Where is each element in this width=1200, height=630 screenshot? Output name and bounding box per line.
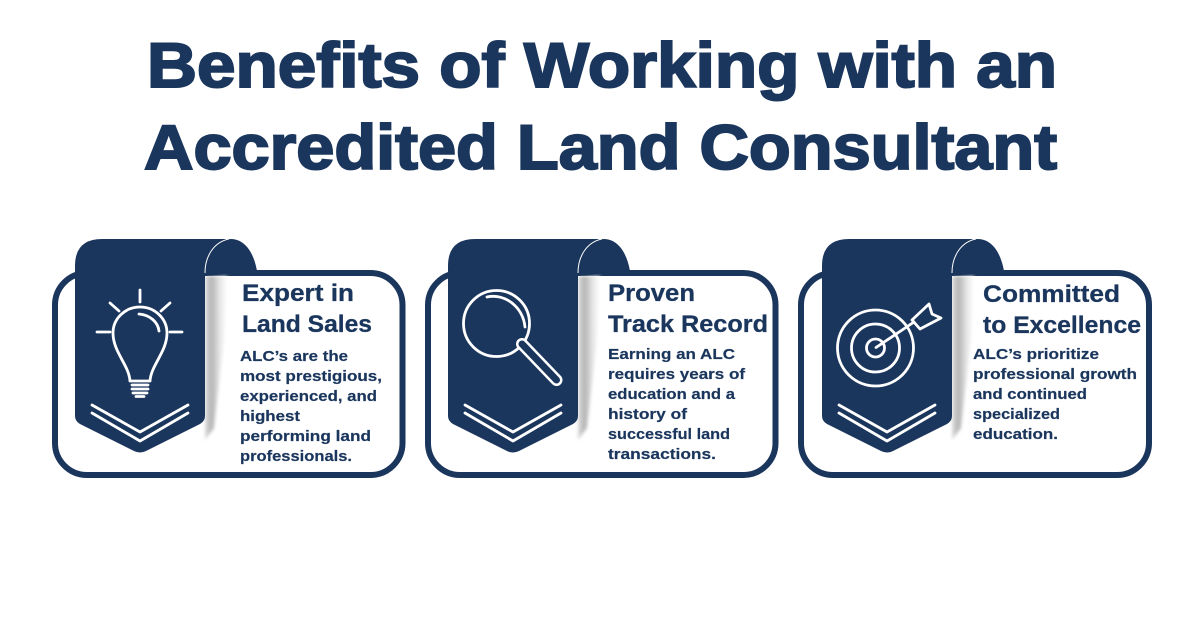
ribbon [822,239,1004,452]
icon: magnifying glass [464,290,556,380]
text block [973,346,1137,443]
text block: requires years of [608,366,746,383]
text block: history of [608,406,688,423]
text block: and continued [973,386,1087,403]
text block: ALC’s are the [240,348,348,365]
card outline [801,273,1149,475]
heading: Expert in [242,280,354,307]
heading: to Excellence [983,312,1141,339]
text block: ALC’s prioritize [973,346,1099,363]
heading [608,280,768,338]
text block: most prestigious, [240,368,382,385]
heading: Proven [608,280,695,307]
text block: experienced, and [240,388,377,405]
heading: Land Sales [242,311,372,338]
title: Accredited Land Consultant [144,113,1057,183]
title: Benefits of Working with an [147,31,1057,101]
text block: education. [973,426,1058,443]
card outline [428,273,776,475]
heading [983,281,1141,339]
panel: Expert in Land Sales [55,239,402,475]
text block: transactions. [608,446,716,463]
text block: successful land [608,426,730,443]
heading: Track Record [608,311,768,338]
title [144,31,1057,183]
panel: Proven Track Record [428,239,776,475]
ribbon [75,239,257,452]
text block: professional growth [973,366,1137,383]
text block: performing land [240,428,371,445]
ribbon [448,239,630,452]
text block [608,346,746,463]
card outline [55,273,402,475]
text block [240,348,382,465]
heading [242,280,372,338]
text block: Earning an ALC [608,346,735,363]
text block: education and a [608,386,736,403]
icon: light bulb [97,290,182,396]
text block: highest [240,408,300,425]
text block: professionals. [240,448,352,465]
panel: Committed to Excellence [801,239,1149,475]
heading: Committed [983,281,1120,308]
icon: target with arrow [838,304,941,386]
text block: specialized [973,406,1060,423]
